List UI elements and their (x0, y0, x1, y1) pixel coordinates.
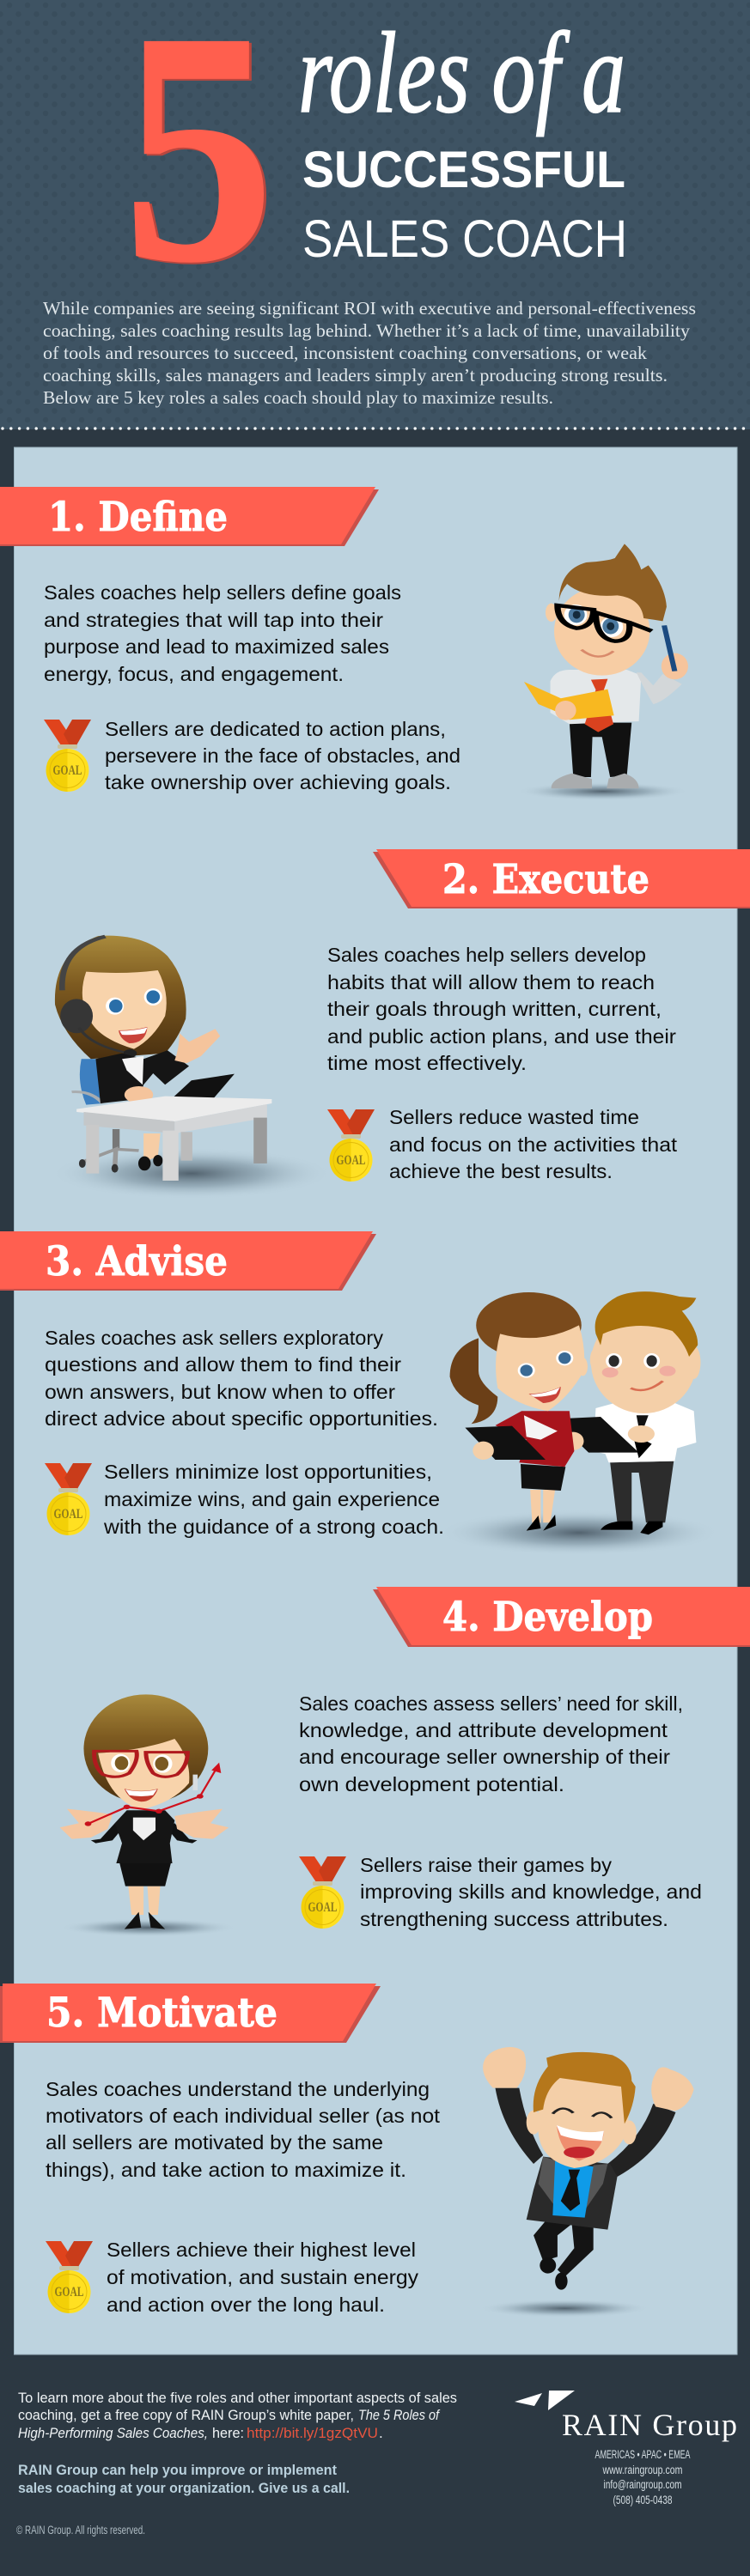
body text 4: and encourage seller ownership of their (299, 1746, 670, 1768)
section 2: execute (50, 849, 750, 1200)
body text 5 (46, 2078, 441, 2181)
logo: RAIN Group (515, 2391, 737, 2442)
body text 2: Sales coaches help sellers develop (327, 944, 646, 966)
ribbon heading 5 (0, 1984, 381, 2043)
ribbon heading 2: 2. Execute (442, 856, 649, 903)
icon: goal medal 2 (327, 1109, 375, 1182)
icon: goal medal 4: GOAL (308, 1900, 337, 1915)
outcome text 1 (105, 718, 460, 793)
intro paragraph: Below are 5 key roles a sales coach should play to maximize results. (43, 387, 553, 408)
footer paragraph with link (18, 2390, 457, 2441)
character: jumping man (479, 2047, 694, 2318)
body text 3: Sales coaches ask sellers exploratory (45, 1327, 384, 1349)
footer call to action: RAIN Group can help you improve or implement (18, 2462, 337, 2478)
body text 1: Sales coaches help sellers define goals (44, 581, 401, 604)
footer paragraph with link: The 5 Roles of (358, 2407, 441, 2423)
outcome text 4: improving skills and knowledge, and (360, 1880, 702, 1903)
section 4: develop (60, 1587, 750, 1937)
body text 1: purpose and lead to maximized sales (44, 635, 389, 658)
body text 4 (299, 1692, 683, 1795)
footer paragraph with link: coaching, get a free copy of RAIN Group’s white paper, (18, 2407, 354, 2423)
icon: goal medal 1: GOAL (53, 763, 82, 778)
section 5: motivate (0, 1984, 694, 2318)
body text 4: Sales coaches assess sellers’ need for skill, (299, 1692, 683, 1715)
outcome text 1: persevere in the face of obstacles, and (105, 744, 460, 767)
header panel (0, 0, 750, 429)
footer paragraph with link: . (379, 2425, 383, 2441)
intro paragraph (43, 298, 696, 408)
outcome text 4: Sellers raise their games by (360, 1854, 613, 1876)
footer paragraph with link: High-Performing Sales Coaches, (18, 2425, 208, 2441)
ribbon heading 1 (0, 487, 379, 546)
body text 2: time most effectively. (327, 1052, 527, 1074)
section 1: define (0, 487, 689, 800)
body text 1: energy, focus, and engagement. (44, 663, 344, 685)
section 3: advise (0, 1231, 720, 1556)
contact details: AMERICAS • APAC • EMEA (595, 2448, 691, 2461)
body text 5: motivators of each individual seller (as not (46, 2105, 441, 2127)
body text 5: Sales coaches understand the underlying (46, 2078, 430, 2100)
outcome text 2: Sellers reduce wasted time (389, 1106, 639, 1128)
icon: goal medal 2: GOAL (337, 1153, 366, 1168)
body text 5: things), and take action to maximize it. (46, 2159, 406, 2181)
character: man with glasses, book and pen (517, 544, 689, 800)
contact details (595, 2448, 691, 2506)
icon: goal medal 4 (299, 1856, 346, 1929)
icon: goal medal 3: GOAL (53, 1507, 82, 1522)
outcome text 5: of motivation, and sustain energy (107, 2266, 419, 2288)
footer call to action: sales coaching at your organization. Give us a call. (18, 2480, 350, 2496)
body text 3: own answers, but know when to offer (45, 1381, 395, 1403)
title line: sales coach: SALES COACH (302, 210, 627, 268)
outcome text 4: strengthening success attributes. (360, 1908, 668, 1930)
intro paragraph: of tools and resources to succeed, inconsistent coaching conversations, or weak (43, 343, 648, 363)
title line: successful: SUCCESSFUL (302, 141, 625, 198)
outcome text 5: and action over the long haul. (107, 2293, 385, 2316)
character: woman and man with tablets (438, 1291, 720, 1556)
outcome text 3: Sellers minimize lost opportunities, (104, 1461, 432, 1483)
copyright: © RAIN Group. All rights reserved. (16, 2524, 145, 2537)
intro paragraph: coaching skills, sales managers and leaders simply aren’t producing strong results. (43, 365, 668, 386)
outcome text 3: with the guidance of a strong coach. (103, 1516, 444, 1538)
outcome text 2: and focus on the activities that (389, 1133, 678, 1156)
intro paragraph: coaching, sales coaching results lag behind. Whether it’s a lack of time, unavailability (43, 320, 691, 341)
footer call to action (18, 2462, 350, 2496)
ribbon heading 3 (0, 1231, 376, 1291)
character: woman with headset at desk (50, 936, 332, 1200)
logo: RAIN Group: RAIN Group (562, 2408, 737, 2442)
title line: roles of a: roles of a (298, 9, 625, 137)
outcome text 3: maximize wins, and gain experience (104, 1488, 440, 1510)
footer paragraph with link: http://bit.ly/1gzQtVU (247, 2425, 378, 2441)
icon: goal medal 3 (45, 1463, 92, 1535)
body text 5: all sellers are motivated by the same (46, 2131, 383, 2154)
body text 2: their goals through written, current, (327, 998, 662, 1020)
outcome text 1: Sellers are dedicated to action plans, (105, 718, 446, 740)
body text 3: direct advice about specific opportunities. (45, 1407, 438, 1430)
outcome text 3 (103, 1461, 444, 1538)
outcome text 5 (107, 2239, 419, 2316)
contact details: info@raingroup.com (603, 2478, 682, 2491)
outcome text 4 (360, 1854, 702, 1930)
ribbon heading 2 (373, 849, 750, 908)
ribbon heading 4: 4. Develop (442, 1594, 653, 1641)
outcome text 2 (389, 1106, 678, 1182)
character: woman with red glasses and rising chart (60, 1694, 237, 1937)
footer (16, 2390, 737, 2537)
footer paragraph with link: To learn more about the five roles and other important aspects of sales (18, 2390, 457, 2406)
body text 4: knowledge, and attribute development (299, 1719, 668, 1741)
body text 1 (44, 581, 401, 685)
contact details: www.raingroup.com (602, 2464, 682, 2476)
icon: goal medal 1 (44, 720, 91, 792)
body text 3: questions and allow them to find their (45, 1353, 401, 1376)
body text 3 (45, 1327, 438, 1430)
contact details: (508) 405-0438 (613, 2494, 672, 2506)
body text 4: own development potential. (299, 1773, 564, 1795)
body text 2 (327, 944, 676, 1074)
icon: goal medal 5: GOAL (55, 2285, 84, 2300)
outcome text 1: take ownership over achieving goals. (105, 771, 451, 793)
ribbon heading 4 (373, 1587, 750, 1647)
ribbon heading 3: 3. Advise (46, 1238, 228, 1285)
main light panel (14, 447, 737, 2354)
intro paragraph: While companies are seeing significant ROI with executive and personal-effectiveness (43, 298, 696, 319)
outcome text 2: achieve the best results. (389, 1160, 613, 1182)
body text 2: habits that will allow them to reach (327, 971, 655, 993)
ribbon heading 5: 5. Motivate (46, 1990, 277, 2037)
outcome text 5: Sellers achieve their highest level (107, 2239, 416, 2261)
icon: goal medal 5 (46, 2241, 93, 2313)
body text 2: and public action plans, and use their (327, 1025, 676, 1048)
footer paragraph with link: here: (212, 2425, 244, 2441)
ribbon heading 1: 1. Define (48, 494, 228, 541)
body text 1: and strategies that will tap into their (44, 609, 383, 631)
